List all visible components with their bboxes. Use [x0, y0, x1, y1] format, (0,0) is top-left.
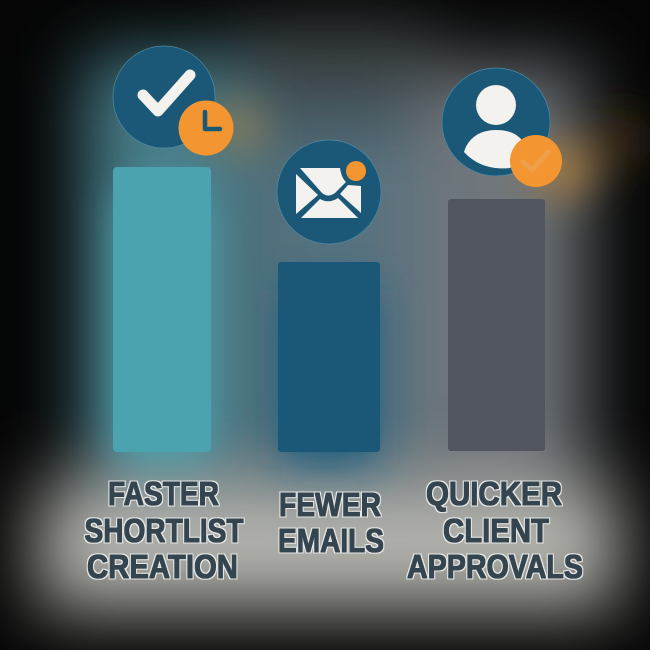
icon: checkmark with clock — [113, 46, 234, 156]
label: quicker client approvals — [407, 475, 583, 585]
label: quicker client approvals: QUICKER — [426, 475, 562, 512]
label: faster shortlist creation — [84, 475, 244, 585]
label: faster shortlist creation: FASTER — [108, 475, 219, 512]
bar: fewer emails — [278, 262, 380, 452]
label: faster shortlist creation: CREATION — [87, 548, 238, 585]
bar: faster shortlist creation — [113, 167, 211, 452]
column: faster shortlist creation — [84, 46, 244, 585]
label: fewer emails: FEWER — [279, 486, 381, 523]
bar: quicker client approvals — [448, 199, 545, 451]
icon: envelope with notification dot — [277, 140, 381, 244]
column: quicker client approvals — [407, 68, 583, 585]
icon: person with check badge — [442, 68, 562, 187]
label: fewer emails — [278, 486, 384, 559]
label: quicker client approvals: APPROVALS — [407, 548, 583, 585]
label: quicker client approvals: CLIENT — [443, 512, 549, 549]
label: fewer emails: EMAILS — [278, 522, 384, 559]
column: fewer emails — [277, 140, 384, 559]
label: faster shortlist creation: SHORTLIST — [84, 512, 244, 549]
